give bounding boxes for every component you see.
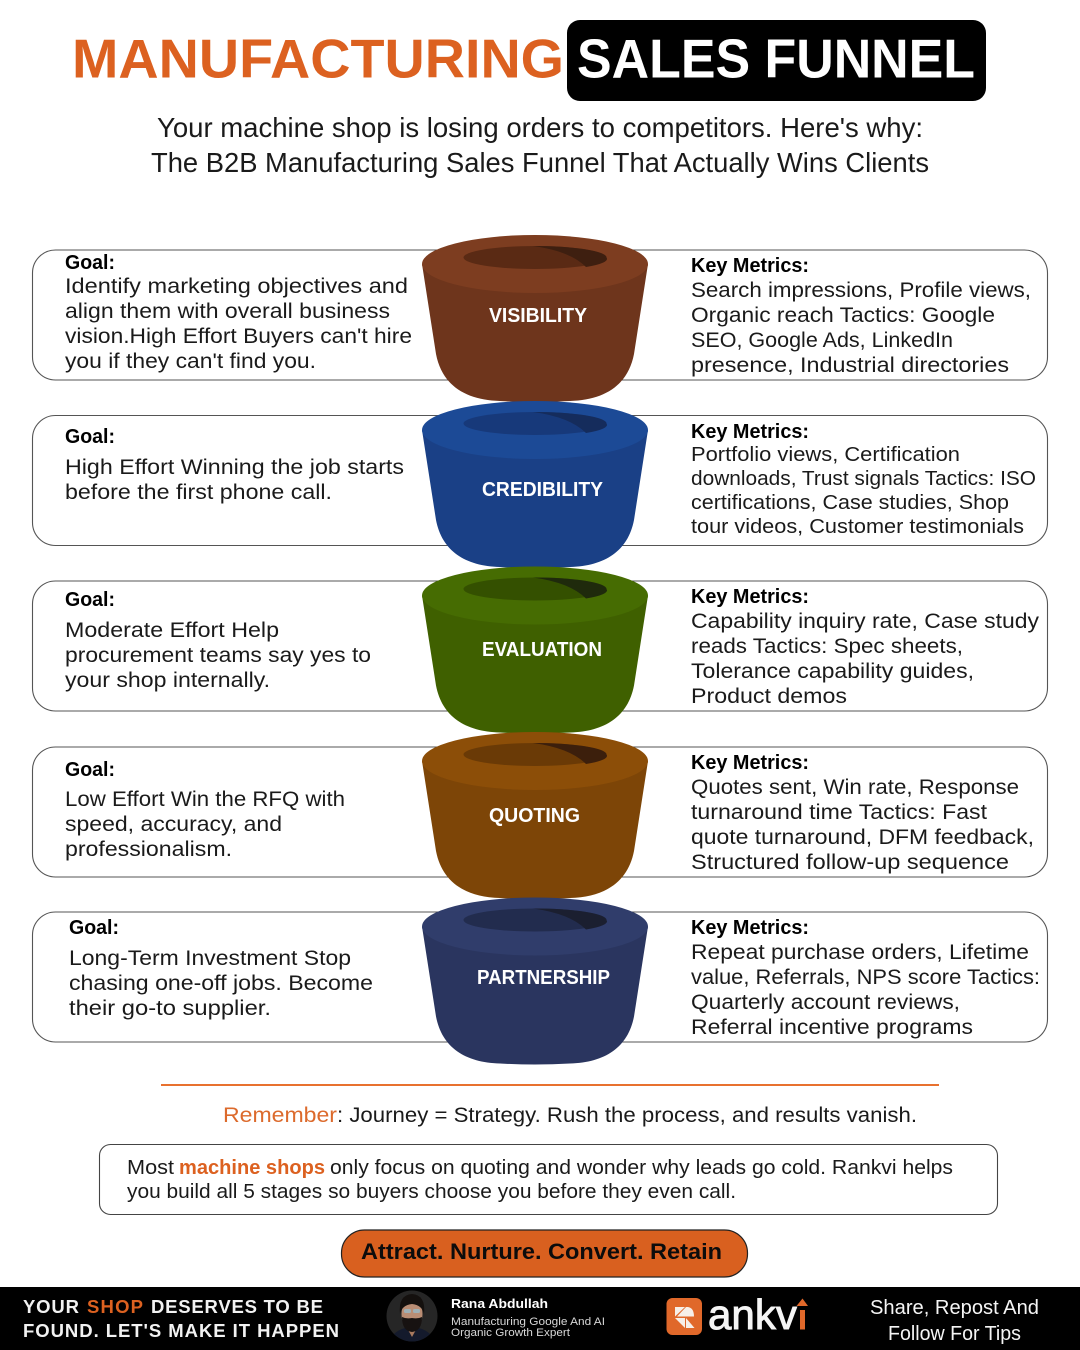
evaluation key metrics text: Key Metrics:	[691, 586, 809, 608]
quoting goal text: Goal:	[65, 759, 115, 781]
quoting key metrics text: Quotes sent, Win rate, Response	[691, 775, 1019, 799]
reminder line: Remember	[223, 1104, 337, 1127]
funnel cup: credibility: CREDIBILITY	[482, 479, 604, 501]
funnel cup: evaluation	[422, 566, 648, 734]
credibility key metrics text: tour videos, Customer testimonials	[691, 515, 1024, 538]
visibility key metrics text: Search impressions, Profile views,	[691, 278, 1031, 302]
partnership key metrics text: Referral incentive programs	[691, 1015, 973, 1039]
title: MANUFACTURING	[72, 28, 564, 90]
author details: Rana Abdullah	[451, 1296, 548, 1311]
Rankvi logo: ankv	[708, 1291, 797, 1338]
evaluation goal text: Goal:	[65, 589, 115, 611]
evaluation goal text: procurement teams say yes to	[65, 643, 371, 667]
evaluation goal text	[65, 589, 371, 692]
visibility goal text: vision.High Effort Buyers can't hire	[65, 324, 412, 348]
credibility goal text: High Effort Winning the job starts	[65, 455, 404, 479]
quoting goal text: professionalism.	[65, 837, 232, 861]
credibility goal text: Goal:	[65, 426, 115, 448]
partnership goal text	[69, 917, 373, 1020]
evaluation key metrics text: Capability inquiry rate, Case study	[691, 609, 1039, 633]
subtitle: Your machine shop is losing orders to competitors. Here's why:	[157, 112, 923, 143]
share prompt: Share, Repost And	[870, 1297, 1039, 1319]
call to action button: Attract. Nurture. Convert. Retain	[361, 1239, 722, 1264]
footer slogan: DESERVES TO BE	[151, 1296, 323, 1317]
quoting goal text	[65, 759, 345, 861]
partnership key metrics text	[691, 917, 1040, 1039]
call to action button	[342, 1230, 748, 1277]
quoting key metrics text	[691, 752, 1034, 874]
visibility goal text: Identify marketing objectives and	[65, 274, 408, 298]
visibility key metrics text: Key Metrics:	[691, 255, 809, 277]
quoting key metrics text: Key Metrics:	[691, 752, 809, 774]
quoting goal text: speed, accuracy, and	[65, 812, 282, 836]
quoting key metrics text: quote turnaround, DFM feedback,	[691, 825, 1034, 849]
credibility key metrics text: Portfolio views, Certification	[691, 443, 960, 466]
callout box: only focus on quoting and wonder why leads go cold. Rankvi helps	[330, 1157, 953, 1179]
footer bar	[0, 1287, 1080, 1350]
footer slogan: FOUND. LET'S MAKE IT HAPPEN	[23, 1320, 339, 1341]
credibility key metrics text: Key Metrics:	[691, 421, 809, 443]
author details	[451, 1296, 605, 1339]
funnel cup: quoting	[422, 732, 648, 899]
quoting key metrics text: Structured follow-up sequence	[691, 850, 1009, 874]
visibility goal text	[65, 252, 412, 373]
subtitle: The B2B Manufacturing Sales Funnel That Actually Wins Clients	[151, 147, 929, 178]
share prompt: Follow For Tips	[888, 1323, 1021, 1345]
credibility goal text	[65, 426, 404, 504]
callout box	[100, 1144, 998, 1214]
callout box: Most	[127, 1157, 174, 1179]
credibility key metrics text	[691, 421, 1036, 538]
author details: Manufacturing Google And AI	[451, 1316, 605, 1328]
title	[72, 20, 986, 101]
visibility key metrics text	[691, 255, 1031, 377]
author details: Organic Growth Expert	[451, 1327, 570, 1339]
share prompt	[870, 1297, 1039, 1345]
reminder line: : Journey = Strategy. Rush the process, and results vanish.	[337, 1104, 917, 1127]
footer slogan: SHOP	[87, 1296, 143, 1317]
visibility key metrics text: presence, Industrial directories	[691, 353, 1009, 377]
panel: visibility stage box	[32, 250, 1048, 380]
partnership goal text: Goal:	[69, 917, 119, 939]
evaluation goal text: Moderate Effort Help	[65, 618, 279, 642]
panel: partnership stage box	[32, 912, 1048, 1042]
partnership key metrics text: Quarterly account reviews,	[691, 990, 960, 1014]
footer slogan: YOUR	[23, 1296, 79, 1317]
evaluation key metrics text: Tolerance capability guides,	[691, 659, 974, 683]
subtitle	[151, 112, 929, 178]
funnel cup: evaluation: EVALUATION	[482, 639, 602, 661]
partnership goal text: their go-to supplier.	[69, 996, 271, 1020]
evaluation key metrics text	[691, 586, 1039, 708]
quoting key metrics text: turnaround time Tactics: Fast	[691, 800, 987, 824]
panel: evaluation stage box	[32, 581, 1048, 711]
title: SALES FUNNEL	[577, 28, 975, 90]
partnership key metrics text: Repeat purchase orders, Lifetime	[691, 940, 1029, 964]
Rankvi logo	[666, 1291, 808, 1338]
quoting goal text: Low Effort Win the RFQ with	[65, 787, 345, 811]
funnel cup: partnership: PARTNERSHIP	[477, 967, 610, 989]
footer slogan	[23, 1296, 339, 1341]
partnership goal text: chasing one-off jobs. Become	[69, 971, 373, 995]
funnel cup: credibility	[422, 401, 648, 568]
callout box: you build all 5 stages so buyers choose you before they even call.	[127, 1181, 736, 1203]
partnership key metrics text: value, Referrals, NPS score Tactics:	[691, 965, 1040, 989]
partnership goal text: Long-Term Investment Stop	[69, 946, 351, 970]
visibility goal text: you if they can't find you.	[65, 349, 316, 373]
credibility key metrics text: downloads, Trust signals Tactics: ISO	[691, 467, 1036, 490]
funnel cup: quoting: QUOTING	[489, 805, 580, 827]
visibility key metrics text: Organic reach Tactics: Google	[691, 303, 995, 327]
evaluation key metrics text: reads Tactics: Spec sheets,	[691, 634, 963, 658]
funnel cup: partnership	[422, 898, 648, 1064]
visibility key metrics text: SEO, Google Ads, LinkedIn	[691, 328, 953, 352]
panel: credibility stage box	[32, 416, 1048, 546]
evaluation key metrics text: Product demos	[691, 684, 847, 708]
funnel cup: visibility: VISIBILITY	[489, 305, 588, 327]
evaluation goal text: your shop internally.	[65, 668, 270, 692]
callout box: machine shops	[179, 1157, 325, 1179]
visibility goal text: align them with overall business	[65, 299, 390, 323]
visibility goal text: Goal:	[65, 252, 115, 274]
funnel cup: visibility	[422, 235, 648, 402]
panel: quoting stage box	[32, 747, 1048, 877]
author portrait	[386, 1290, 438, 1342]
partnership key metrics text: Key Metrics:	[691, 917, 809, 939]
credibility goal text: before the first phone call.	[65, 480, 332, 504]
credibility key metrics text: certifications, Case studies, Shop	[691, 491, 1009, 514]
